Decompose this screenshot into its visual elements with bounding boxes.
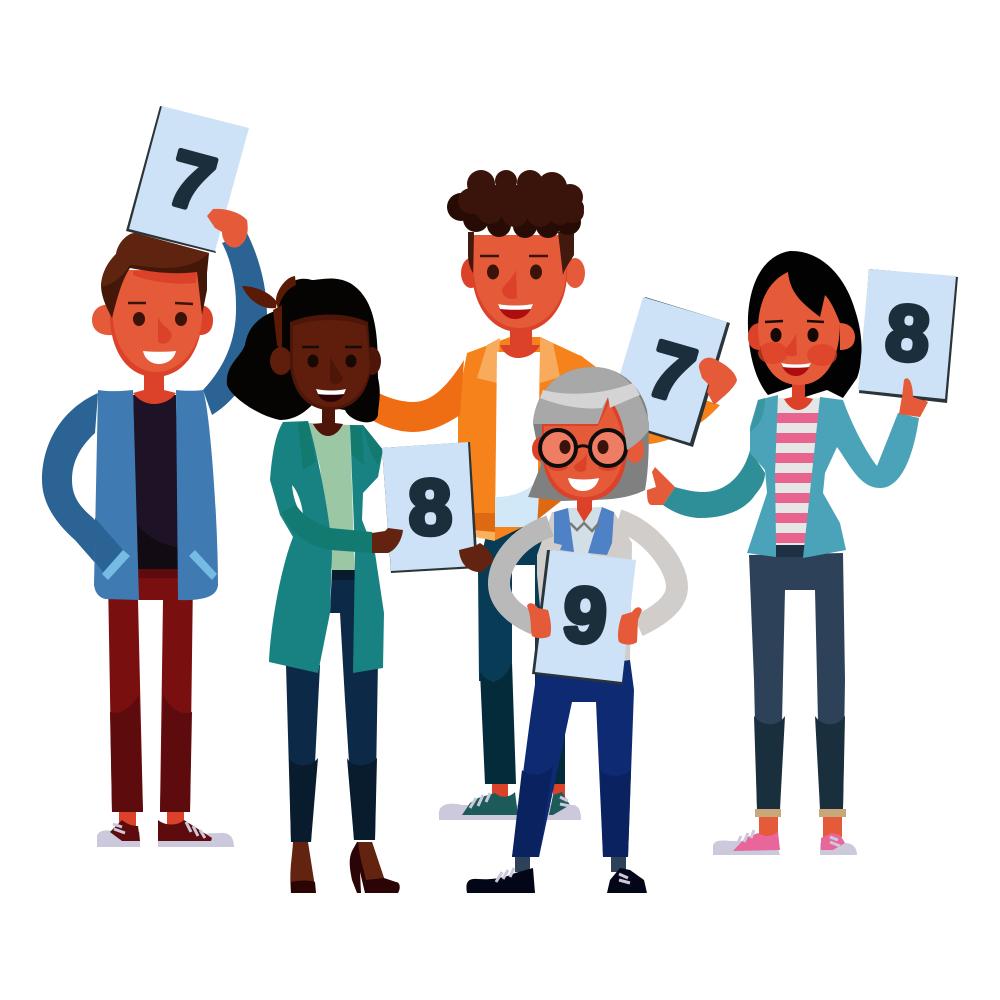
hands on card	[527, 603, 642, 645]
neck	[784, 380, 813, 410]
hand holding card	[899, 378, 928, 417]
hair	[101, 233, 209, 318]
shoes	[466, 857, 647, 893]
teal coat	[269, 421, 384, 673]
trousers	[286, 570, 378, 842]
hair back	[748, 251, 862, 398]
neck	[500, 325, 540, 358]
far arm	[663, 450, 765, 518]
person: woman with striped shirt	[647, 251, 958, 855]
neck	[313, 405, 343, 436]
score card: 9: 9	[559, 569, 610, 661]
score card: 7: 7	[638, 324, 704, 420]
vest and shirt	[554, 507, 614, 555]
striped shirt	[773, 398, 822, 557]
hair back	[528, 367, 649, 501]
score card: 8	[382, 442, 478, 573]
shoes	[439, 784, 581, 820]
left arm in pocket	[42, 393, 123, 572]
sneakers	[97, 812, 234, 847]
score card: 7	[126, 106, 249, 253]
score card: 8: 8	[882, 287, 933, 379]
hair top and fringe	[533, 367, 649, 450]
arm at pocket	[95, 518, 123, 572]
high heels	[290, 842, 400, 893]
white shirt	[495, 352, 540, 527]
score card: 7: 7	[159, 133, 224, 229]
jacket	[372, 337, 590, 541]
score card: 9	[532, 550, 636, 685]
neck	[133, 370, 176, 404]
raised arm	[203, 233, 267, 415]
neck	[577, 498, 592, 522]
trousers	[749, 553, 845, 809]
curly hair	[447, 170, 584, 238]
person: man with curly hair and orange jacket	[372, 170, 737, 820]
head	[92, 233, 213, 377]
shoes and cuffs	[713, 809, 857, 855]
hand at card	[372, 528, 403, 553]
blue jacket	[94, 390, 218, 600]
hand pointing	[647, 467, 675, 505]
pockets	[102, 550, 130, 580]
hair back	[227, 276, 380, 422]
score card: 7	[607, 297, 730, 447]
fingers on card	[900, 378, 928, 417]
person: woman with dark skin and teal coat	[227, 276, 493, 893]
person: man with blue jacket	[42, 106, 267, 847]
hand on card	[207, 209, 248, 248]
grey jacket torso	[537, 512, 632, 660]
head	[532, 397, 644, 501]
green shirt	[308, 423, 355, 570]
sleeves	[499, 520, 677, 626]
head	[270, 314, 381, 410]
trousers	[108, 569, 193, 812]
right arm behind card	[580, 355, 720, 444]
person: grey-haired woman with glasses	[466, 367, 677, 893]
head	[748, 272, 855, 385]
teal jacket	[747, 395, 919, 558]
head	[447, 170, 585, 332]
blue trousers	[512, 660, 634, 857]
score card: 8: 8	[407, 462, 453, 552]
dark shirt	[133, 395, 180, 569]
glasses	[540, 430, 630, 466]
trousers	[478, 527, 565, 784]
hand holding card	[699, 358, 737, 405]
hand at card right	[459, 543, 493, 572]
score card: 8	[858, 269, 958, 403]
